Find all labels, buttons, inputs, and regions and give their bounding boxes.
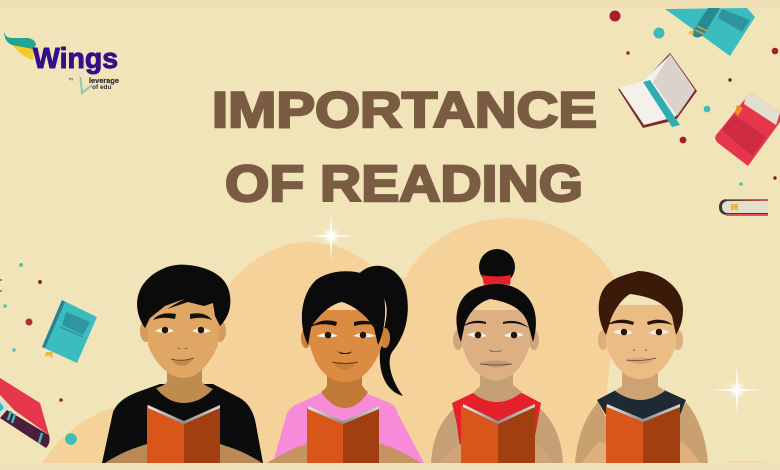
nose and mouth: [488, 349, 503, 352]
logo byline: [69, 76, 119, 93]
book: [147, 405, 220, 463]
brows: [153, 313, 212, 320]
bottom strip: [0, 463, 780, 470]
face: [462, 310, 530, 380]
arms: [575, 402, 708, 463]
ears: [301, 328, 311, 348]
arms: [431, 405, 563, 463]
neck: [473, 370, 522, 402]
eyes: [155, 328, 211, 333]
logo swoosh: [4, 31, 36, 60]
face: [606, 305, 676, 379]
neck: [156, 365, 213, 403]
hair: [456, 284, 536, 342]
shirt: [102, 384, 263, 463]
brows: [310, 320, 380, 327]
book: [606, 404, 680, 463]
eyes: [316, 333, 376, 338]
book: open white: [618, 53, 697, 128]
hair: [302, 271, 385, 345]
hands: [582, 442, 700, 463]
ears: [598, 330, 608, 350]
brows: [462, 321, 529, 328]
sparkle: top centre: [306, 212, 356, 261]
face: [309, 310, 383, 382]
person: boy with dark top: [575, 271, 708, 463]
neck: [615, 368, 665, 400]
logo: Wings by Leverage Edu: [4, 31, 119, 93]
book: teal left: [42, 300, 97, 363]
face: [147, 300, 219, 378]
book: [307, 406, 379, 463]
book: [461, 404, 535, 463]
hair: [137, 265, 230, 328]
ponytail: [358, 266, 408, 396]
person: girl with hair bun: [431, 249, 563, 463]
bun: [479, 249, 515, 285]
ears: [453, 330, 463, 350]
eyes: [613, 329, 669, 335]
person: boy with black shirt: [102, 265, 263, 463]
nose and mouth: [337, 351, 353, 354]
top: [597, 390, 686, 463]
arms and hands: [267, 444, 421, 463]
ears: [140, 320, 152, 342]
arms and hands: [105, 443, 262, 463]
logo byline: of edu: [92, 84, 112, 91]
book: small closed: [719, 199, 768, 216]
book: red: [715, 95, 780, 166]
person: girl with pink shirt: [267, 266, 424, 463]
logo byline: leverage: [89, 78, 119, 85]
top: [452, 393, 541, 463]
brows: [607, 320, 673, 325]
background blobs: [42, 218, 616, 463]
nose and mouth: [176, 347, 189, 349]
hair band: [482, 275, 511, 285]
sparkle: bottom right: [712, 365, 762, 415]
neck: [321, 368, 368, 408]
shirt: [273, 392, 424, 463]
title: [212, 82, 597, 212]
title: OF READING: [225, 155, 583, 212]
title: IMPORTANCE: [212, 82, 597, 138]
hair: [599, 271, 683, 335]
nose and mouth: [633, 349, 647, 351]
logo byline: by: [69, 76, 73, 81]
hands: [440, 444, 552, 463]
logo wordmark: Wings: [33, 43, 118, 75]
book: teal top right: [665, 8, 755, 56]
book: red left: [0, 378, 50, 448]
eyes: [467, 332, 524, 337]
